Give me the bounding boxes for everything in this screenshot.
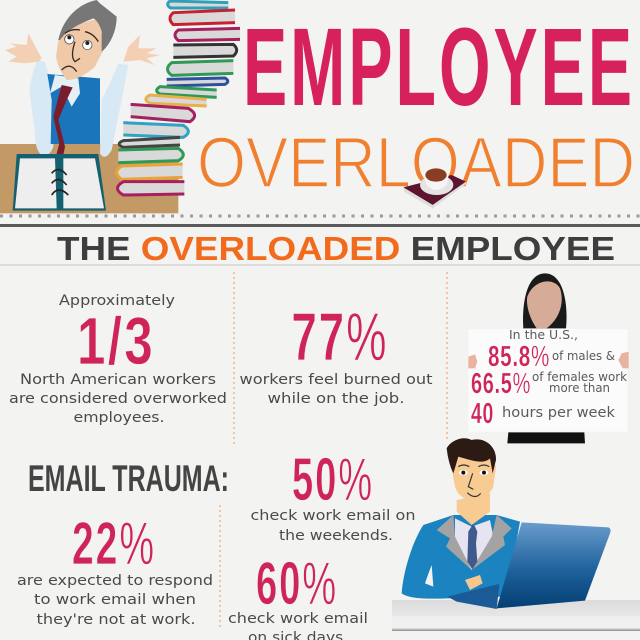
stat: 60 percent on sick days: 60% [256, 550, 338, 617]
stat card: hours worked: hours per week [502, 405, 616, 421]
divider: dotted band and rule [0, 216, 640, 265]
stat: one third of workers: Approximately [59, 293, 175, 309]
illustration: stack of books [117, 1, 240, 195]
stat card: hours worked: of males & [552, 349, 615, 363]
stat: 60 percent on sick days [228, 550, 368, 640]
column dividers [220, 272, 447, 630]
stat card: hours worked: 85.8% [488, 341, 550, 373]
stat: 22 percent expected to respond: are expected to respond [17, 573, 213, 589]
stat: 50 percent on weekends [250, 446, 416, 544]
stat: 50 percent on weekends: check work email on [250, 508, 416, 524]
stat card: hours worked: 40 [471, 398, 494, 430]
illustration: man at laptop [402, 438, 611, 609]
stat: 50 percent on weekends: 50% [292, 446, 374, 513]
heading: the overloaded employee: THE OVERLOADED EMPLOYEE [57, 230, 615, 267]
stat: one third of workers: 1/3 [77, 304, 155, 379]
stat card: hours worked: of females work [532, 370, 627, 384]
stat: one third of workers: are considered overworked [9, 391, 227, 407]
stat: 77 percent burned out [240, 299, 433, 407]
heading: email trauma: EMAIL TRAUMA: [28, 458, 229, 499]
stat: 60 percent on sick days: check work email [228, 611, 368, 627]
illustration: overwhelmed employee at desk [0, 0, 178, 213]
icon: coffee cup on book [403, 167, 466, 208]
stat: 22 percent expected to respond: 22% [72, 510, 156, 577]
illustration: desk surface [392, 600, 640, 631]
stat: 77 percent burned out: workers feel burned out [240, 372, 433, 388]
stat card: hours worked [471, 328, 627, 430]
stat card: hours worked: 66.5% [471, 368, 531, 400]
stat: 77 percent burned out: while on the job. [268, 391, 404, 407]
stat: 22 percent expected to respond: to work email when [34, 592, 196, 608]
stat: 22 percent expected to respond [17, 510, 213, 628]
illustration: woman holding sign [468, 273, 629, 443]
stat: 22 percent expected to respond: they're not at work. [36, 612, 196, 628]
stat: one third of workers [9, 293, 227, 426]
stat: 50 percent on weekends: the weekends. [279, 528, 393, 544]
stat card: hours worked: In the U.S., [509, 328, 578, 342]
stat: one third of workers: North American workers [20, 372, 216, 388]
stat: 77 percent burned out: 77% [292, 299, 388, 375]
stat: one third of workers: employees. [74, 410, 164, 426]
stat card: hours worked: more than [549, 381, 610, 395]
